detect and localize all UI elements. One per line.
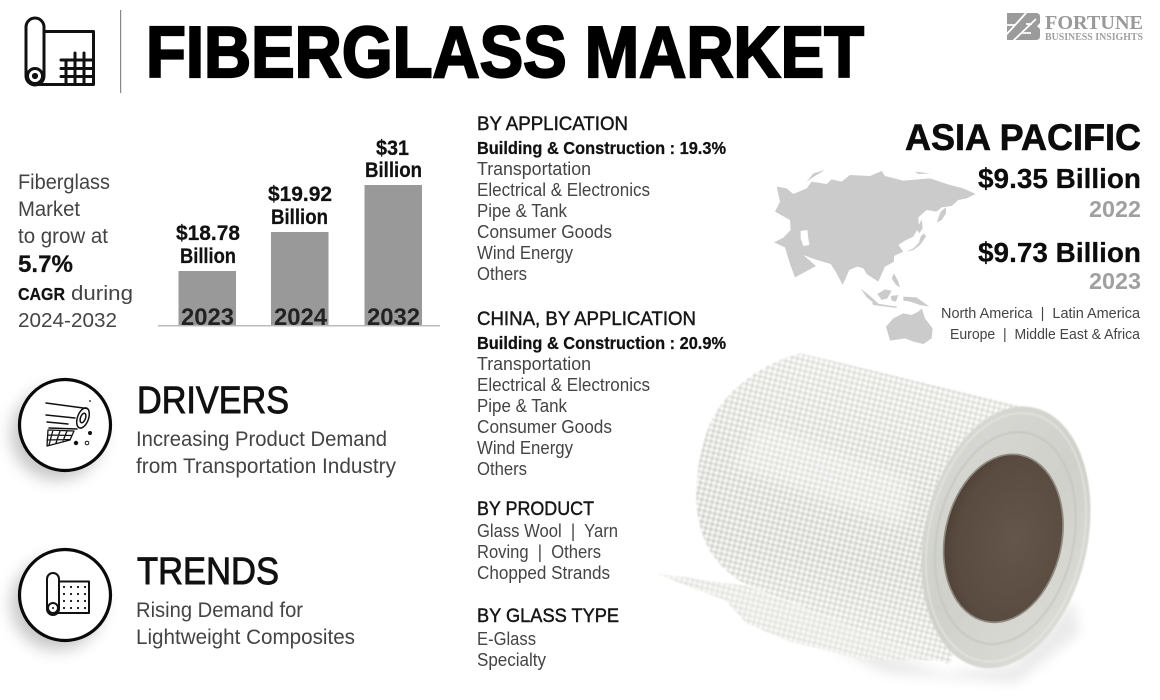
bar year labels: 2024: [274, 304, 328, 331]
bar year labels: [181, 304, 420, 331]
text: other regions: Europe | Middle East & Africa: [950, 326, 1141, 343]
map: southeast asia islands: [861, 273, 929, 308]
map: Asia Pacific: [774, 170, 976, 344]
list: application segments: Wind Energy: [477, 243, 573, 263]
map: japan and sakhalin: [906, 207, 946, 252]
list: product segments: Glass Wool | Yarn: [477, 521, 618, 541]
text: trends description: [136, 599, 355, 649]
bar 2032: [364, 185, 422, 325]
bar value labels: $31: [376, 137, 409, 160]
CAGR text block: 5.7%: [18, 251, 73, 278]
CAGR text block: Market: [18, 198, 80, 221]
stat: 2022 value: $9.35 Billion: [978, 163, 1141, 194]
title: FIBERGLASS MARKET: [146, 13, 864, 93]
heading: china by application: CHINA, BY APPLICATION: [477, 308, 696, 330]
header icon: fabric roll with grid: [26, 18, 94, 85]
list: china application segments: Building & Construction : 20.9%: [477, 333, 726, 353]
list: china application segments: Consumer Goods: [477, 417, 612, 437]
icon: trends circle with dotted roll: [11, 550, 110, 650]
bar 2023: [178, 271, 236, 325]
logo: Fortune Business Insights: [1005, 12, 1143, 43]
logo mark: [1005, 12, 1040, 41]
map: arctic islands: [807, 170, 930, 182]
list: glass type segments: E-Glass: [477, 629, 536, 649]
roll shadow: [750, 600, 1080, 683]
heading: by glass type: BY GLASS TYPE: [477, 605, 619, 627]
bar chart: [158, 137, 440, 331]
roll core hole: [929, 443, 1078, 634]
text: drivers description: [136, 428, 396, 478]
bar 2024: [271, 232, 328, 325]
image: fiberglass mesh roll: [657, 353, 1113, 684]
list: glass type segments: Specialty: [477, 650, 546, 670]
logo tagline: BUSINESS INSIGHTS: [1045, 32, 1143, 43]
list: glass type segments: [477, 629, 546, 670]
logo wordmark: FORTUNE: [1045, 12, 1143, 34]
list: china application segments: Wind Energy: [477, 438, 573, 458]
list: application segments: Building & Construction : 19.3%: [477, 138, 726, 158]
bar value labels: Billion: [180, 245, 236, 268]
heading: by product: BY PRODUCT: [477, 498, 594, 520]
bar value labels: $19.92: [268, 183, 332, 206]
bar value labels: [176, 137, 422, 268]
roll body: [696, 353, 1023, 665]
CAGR text block: 2024-2032: [18, 310, 117, 332]
list: application segments: Electrical & Electronics: [477, 180, 650, 200]
stat: 2023 value: $9.73 Billion: [978, 237, 1141, 268]
panel: china by application: [477, 308, 726, 479]
text: drivers description: from Transportation Industry: [136, 455, 396, 478]
text: drivers description: Increasing Product Demand: [136, 428, 387, 451]
heading: Asia Pacific: ASIA PACIFIC: [905, 117, 1141, 158]
panel: by product: [477, 498, 618, 583]
list: application segments: [477, 138, 726, 284]
list: application segments: Transportation: [477, 159, 591, 179]
panel: by glass type: [477, 605, 619, 670]
stat: 2023 year: 2023: [1089, 268, 1141, 294]
CAGR text block: during: [71, 283, 133, 305]
panel: drivers: [11, 380, 396, 480]
list: china application segments: Pipe & Tank: [477, 396, 568, 416]
list: product segments: Chopped Strands: [477, 563, 610, 583]
list: application segments: Consumer Goods: [477, 222, 612, 242]
CAGR text block: CAGR: [18, 284, 65, 304]
list: china application segments: Electrical & Electronics: [477, 375, 650, 395]
heading: drivers: DRIVERS: [137, 380, 289, 422]
bar year labels: 2032: [367, 304, 420, 331]
panel: trends: [11, 550, 355, 650]
list: china application segments: Others: [477, 459, 527, 479]
list: application segments: Pipe & Tank: [477, 201, 568, 221]
loose mesh flap: [657, 573, 943, 661]
icon: drivers circle with roll: [11, 380, 110, 480]
map: australia: [886, 308, 933, 344]
list: product segments: [477, 521, 618, 583]
text: other regions: [941, 305, 1141, 343]
heading: by application: BY APPLICATION: [477, 113, 628, 135]
bar value labels: Billion: [365, 159, 422, 182]
header divider: [120, 10, 121, 93]
list: application segments: Others: [477, 264, 527, 284]
stat: 2022 year: 2022: [1089, 196, 1141, 222]
text: trends description: Rising Demand for: [136, 599, 303, 622]
panel: Asia Pacific stats: [905, 117, 1141, 343]
text: trends description: Lightweight Composites: [136, 626, 355, 649]
list: china application segments: [477, 333, 726, 479]
roll end face: [899, 391, 1113, 684]
CAGR text block: to grow at: [18, 225, 108, 248]
list: china application segments: Transportation: [477, 354, 591, 374]
heading: trends: TRENDS: [137, 551, 279, 593]
list: product segments: Roving | Others: [477, 542, 601, 562]
CAGR text block: Fiberglass: [18, 171, 110, 194]
panel: by application: [477, 113, 726, 284]
text: other regions: North America | Latin America: [941, 305, 1141, 322]
bar year labels: 2023: [181, 304, 234, 331]
bar value labels: $18.78: [176, 222, 240, 245]
CAGR text block: [18, 171, 133, 332]
bar value labels: Billion: [271, 206, 328, 229]
